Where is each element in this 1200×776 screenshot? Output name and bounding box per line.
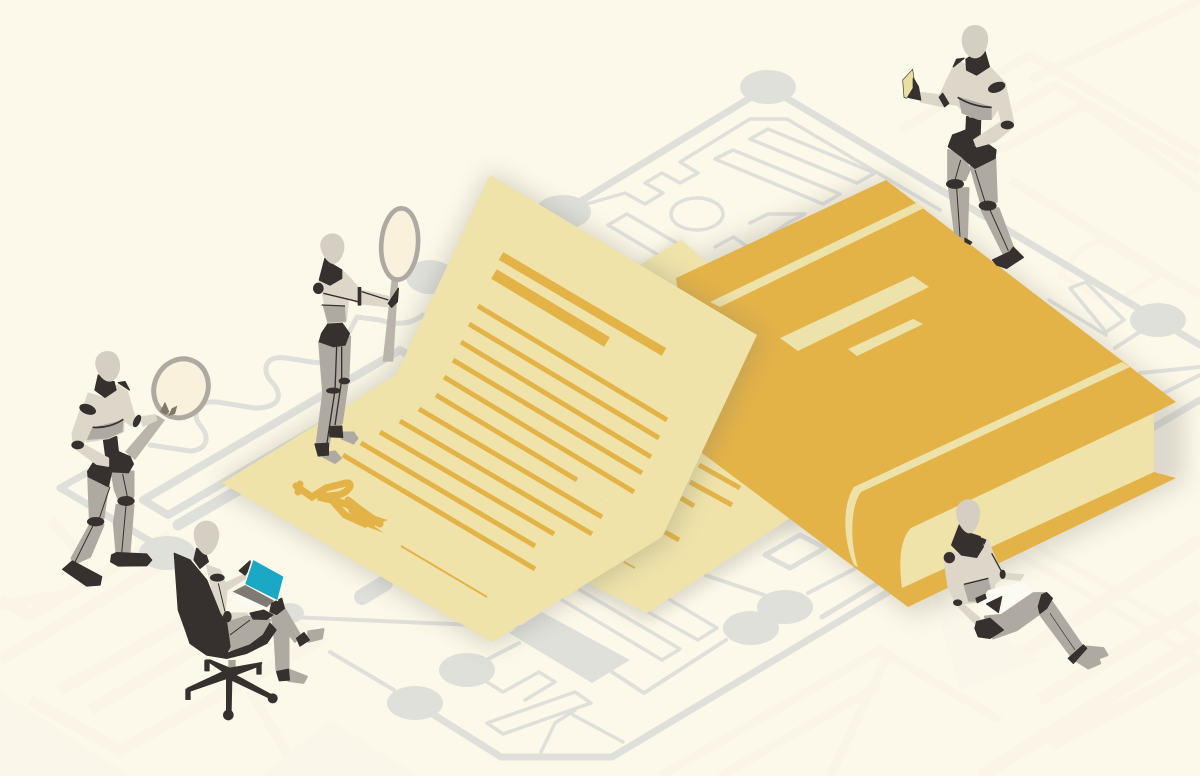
cover label bars [780, 276, 929, 351]
thin trace lines [290, 320, 1200, 693]
shadow: book [660, 175, 1185, 618]
robot: sitting against book with laptop [944, 499, 1107, 668]
document upper flap [396, 175, 757, 537]
robot: standing with upright magnifier [314, 207, 420, 463]
circuit bar and block [362, 583, 385, 597]
signature line [401, 546, 487, 597]
document lower flap [222, 375, 662, 642]
robot: seated on office chair with laptop [174, 521, 323, 720]
heading bars [501, 256, 664, 352]
magnifier [125, 350, 218, 460]
book cover and spine [676, 180, 1176, 607]
outlined circuit components [487, 119, 1124, 752]
chair seat and back [174, 553, 276, 658]
office chair base [186, 660, 277, 720]
body text lines [343, 306, 667, 569]
laptop [976, 582, 1037, 615]
book pages [900, 413, 1154, 588]
laptop [227, 559, 284, 611]
robot: standing with round magnifier [63, 350, 218, 586]
magnifier [379, 207, 420, 362]
back document text lines [665, 465, 740, 540]
book [676, 180, 1176, 607]
front document [222, 175, 757, 642]
faint floor patch [0, 590, 1040, 776]
signature [296, 483, 380, 524]
back document [520, 240, 790, 613]
bar outline traces [143, 350, 425, 515]
robot: top right with tablet on book [903, 25, 1023, 268]
cover top stripe [710, 203, 924, 307]
circuit nodes [139, 70, 1186, 720]
spine stripe [845, 362, 1130, 567]
shadow: front document [216, 170, 764, 648]
shadow: back document [575, 234, 800, 622]
curvy trace [150, 315, 423, 451]
